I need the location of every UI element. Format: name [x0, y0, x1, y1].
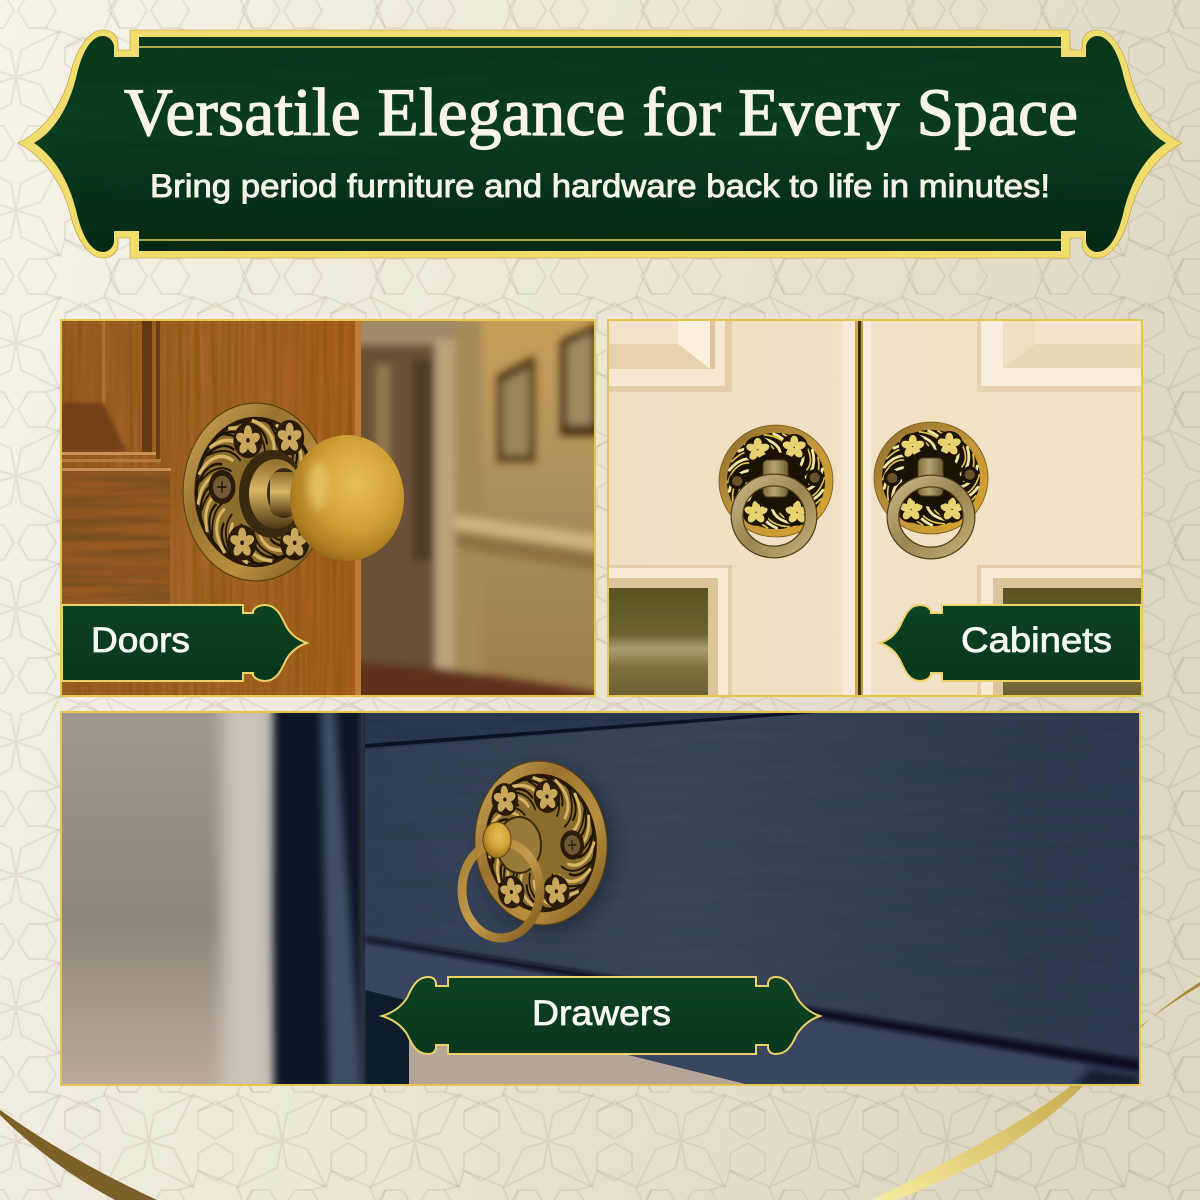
doors label — [62, 605, 307, 681]
title: Versatile Elegance for Every Space — [124, 74, 1078, 150]
drawers photo — [40, 700, 1140, 1100]
hallway background — [361, 321, 594, 695]
left ring shadow — [737, 480, 811, 552]
decorative bronze arc, bottom left — [0, 1110, 157, 1200]
drawers label text: Drawers — [532, 994, 671, 1033]
doors label text: Doors — [91, 621, 190, 660]
upper gap — [365, 712, 830, 748]
navy drawers — [365, 712, 1140, 1086]
cabinets label shape — [880, 605, 1141, 681]
knob collar — [239, 450, 298, 538]
doors label shape — [62, 605, 307, 681]
left door mouldings — [608, 320, 732, 703]
decorative gold arc, bottom right — [872, 982, 1200, 1200]
drawers panel border — [61, 712, 1140, 1085]
panel: drawers — [40, 700, 1140, 1100]
right ring shadow — [893, 481, 969, 553]
wood door — [61, 320, 361, 698]
lower gap — [365, 937, 1140, 1072]
doors photo — [61, 310, 600, 710]
cabinets photo — [608, 320, 1142, 703]
doors panel border — [61, 320, 595, 696]
subtitle: Bring period furniture and hardware back to life in minutes! — [150, 168, 1050, 204]
drawer plate shadow — [482, 768, 614, 932]
drawer ring ball — [483, 822, 511, 858]
icon: right ring pull — [874, 422, 988, 553]
knob neck — [270, 472, 295, 516]
lower door panel — [61, 471, 170, 606]
banner green texture — [30, 30, 1170, 258]
door gap — [843, 320, 871, 698]
banner gold frame — [18, 30, 1182, 258]
cream doors — [608, 320, 1142, 698]
banner inner gold lines — [139, 47, 1061, 240]
right door glass — [1003, 588, 1142, 698]
knob screw — [208, 470, 236, 504]
right ring — [893, 481, 969, 553]
floor — [409, 1001, 753, 1086]
cabinets label text: Cabinets — [961, 621, 1112, 660]
door panel shadow — [61, 403, 127, 452]
right door mouldings — [977, 320, 1142, 703]
drawer hub — [497, 817, 541, 873]
cabinets panel border — [608, 320, 1142, 696]
left ring plate — [719, 425, 833, 537]
panel: doors — [61, 310, 600, 710]
title banner — [18, 30, 1182, 258]
icon: drawer ring pull — [462, 757, 614, 938]
icon: left ring pull — [719, 425, 833, 552]
right corner shadow — [1075, 1068, 1140, 1086]
left ring — [737, 480, 811, 552]
icon: brass door knob — [183, 403, 404, 581]
lower drawer — [365, 937, 1140, 1086]
right ring plate — [874, 422, 988, 534]
drawers label shape — [382, 977, 820, 1054]
drawer plate — [469, 757, 613, 929]
door grooves — [61, 320, 171, 471]
knob dome — [290, 435, 404, 561]
left door glass — [608, 588, 708, 698]
knob rosette — [183, 403, 329, 581]
blurred room — [62, 713, 422, 1084]
upper drawer — [365, 713, 818, 750]
panel: cabinets — [608, 320, 1142, 703]
drawer ring — [462, 842, 540, 938]
left ring bail — [763, 460, 788, 497]
right ring bail — [918, 458, 943, 496]
cabinets label — [880, 605, 1141, 681]
drawers label — [382, 977, 820, 1054]
main drawer face — [365, 712, 1140, 1064]
banner green field — [34, 36, 1166, 252]
knob highlight — [308, 462, 328, 510]
